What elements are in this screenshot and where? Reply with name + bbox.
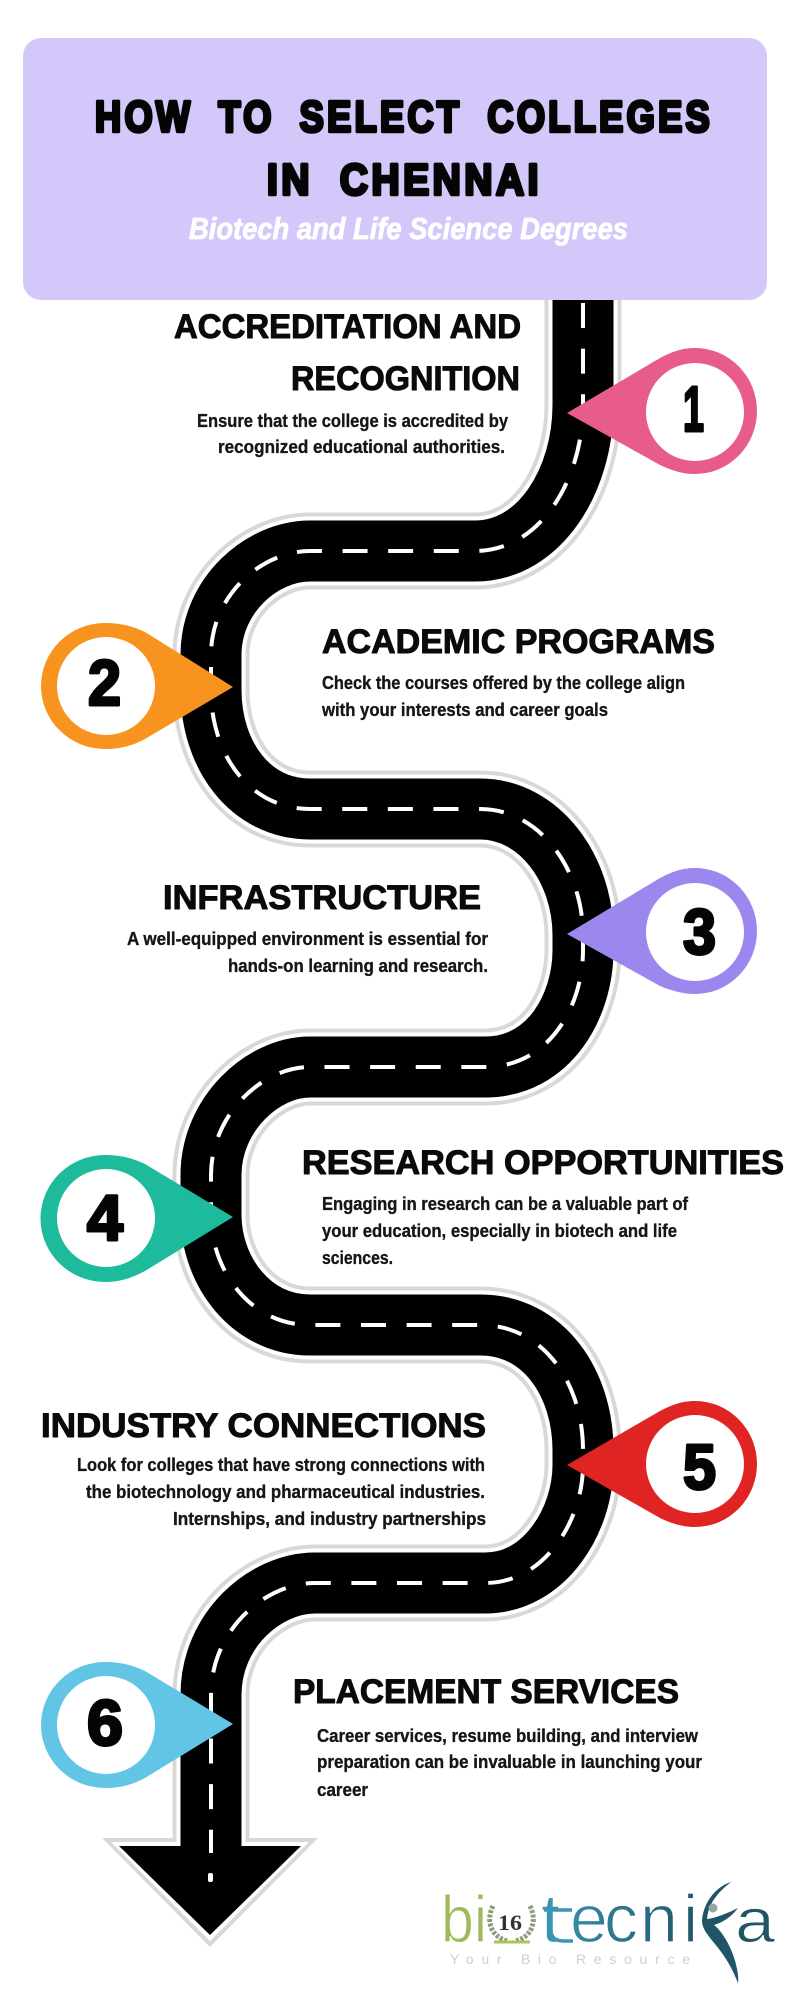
body 4 second line: your education, especially in biotech and life — [322, 1220, 677, 1241]
logo: biotecnika: bi — [441, 1882, 487, 1956]
pin 2: 2 — [88, 647, 121, 719]
pin 4: 4 — [87, 1182, 123, 1254]
pin 3: 3 — [683, 896, 716, 968]
body 4: Engaging in research can be a valuable part of — [322, 1193, 689, 1214]
section 6: placement services — [293, 1673, 702, 1800]
body 6: Career services, resume building, and interview — [317, 1725, 699, 1746]
body 1: Ensure that the college is accredited by — [197, 410, 509, 431]
heading 4: RESEARCH OPPORTUNITIES — [302, 1144, 784, 1182]
heading 2: ACADEMIC PROGRAMS — [322, 623, 715, 661]
body 3: A well-equipped environment is essential for — [127, 928, 488, 949]
body 6 second line: preparation can be invaluable in launching your — [317, 1751, 702, 1772]
section 4: research opportunities — [302, 1144, 784, 1268]
heading 1: ACCREDITATION AND — [174, 308, 521, 346]
pin 2 — [41, 623, 233, 749]
subtitle: Biotech and Life Science Degrees — [189, 211, 628, 246]
pin 3 — [567, 868, 757, 994]
heading 3: INFRASTRUCTURE — [163, 879, 481, 917]
section 2: academic programs — [321, 623, 715, 720]
body 6 third line: career — [317, 1779, 368, 1800]
logo: biotecnika: 16 — [498, 1910, 522, 1935]
body 3 second line: hands-on learning and research. — [228, 955, 488, 976]
section 1: accreditation and recognition — [174, 308, 521, 457]
section 5: industry connections — [41, 1407, 486, 1529]
heading 6: PLACEMENT SERVICES — [293, 1673, 679, 1711]
body 4 third line: sciences. — [322, 1247, 393, 1268]
body 5: Look for colleges that have strong connections with — [77, 1454, 485, 1475]
logo: biotecnika — [441, 1881, 776, 1983]
section 3: infrastructure — [127, 879, 488, 976]
body 5 third line: Internships, and industry partnerships — [173, 1508, 486, 1529]
pin 1 — [567, 348, 757, 474]
body 5 second line: the biotechnology and pharmaceutical industries. — [86, 1481, 485, 1502]
pin 5 — [567, 1401, 757, 1527]
pin 6: 6 — [87, 1687, 123, 1759]
heading 1 second line: RECOGNITION — [291, 360, 520, 398]
body 2 second line: with your interests and career goals — [321, 699, 608, 720]
heading 5: INDUSTRY CONNECTIONS — [41, 1407, 486, 1445]
pin 6 — [41, 1662, 233, 1788]
pin 5: 5 — [683, 1431, 716, 1503]
logo: biotecnika: Your Bio Resource — [450, 1951, 690, 1967]
title line 2: IN CHENNAI — [267, 156, 542, 204]
body 2: Check the courses offered by the college align — [322, 672, 685, 693]
body 1 second line: recognized educational authorities. — [218, 436, 505, 457]
pin 4 — [40, 1155, 233, 1282]
winding road with arrow — [102, 290, 583, 1947]
panel: header — [23, 38, 767, 300]
pin 1: 1 — [683, 373, 704, 445]
logo: biotecnika: tecni — [541, 1881, 698, 1957]
logo: biotecnika: a — [735, 1887, 776, 1956]
